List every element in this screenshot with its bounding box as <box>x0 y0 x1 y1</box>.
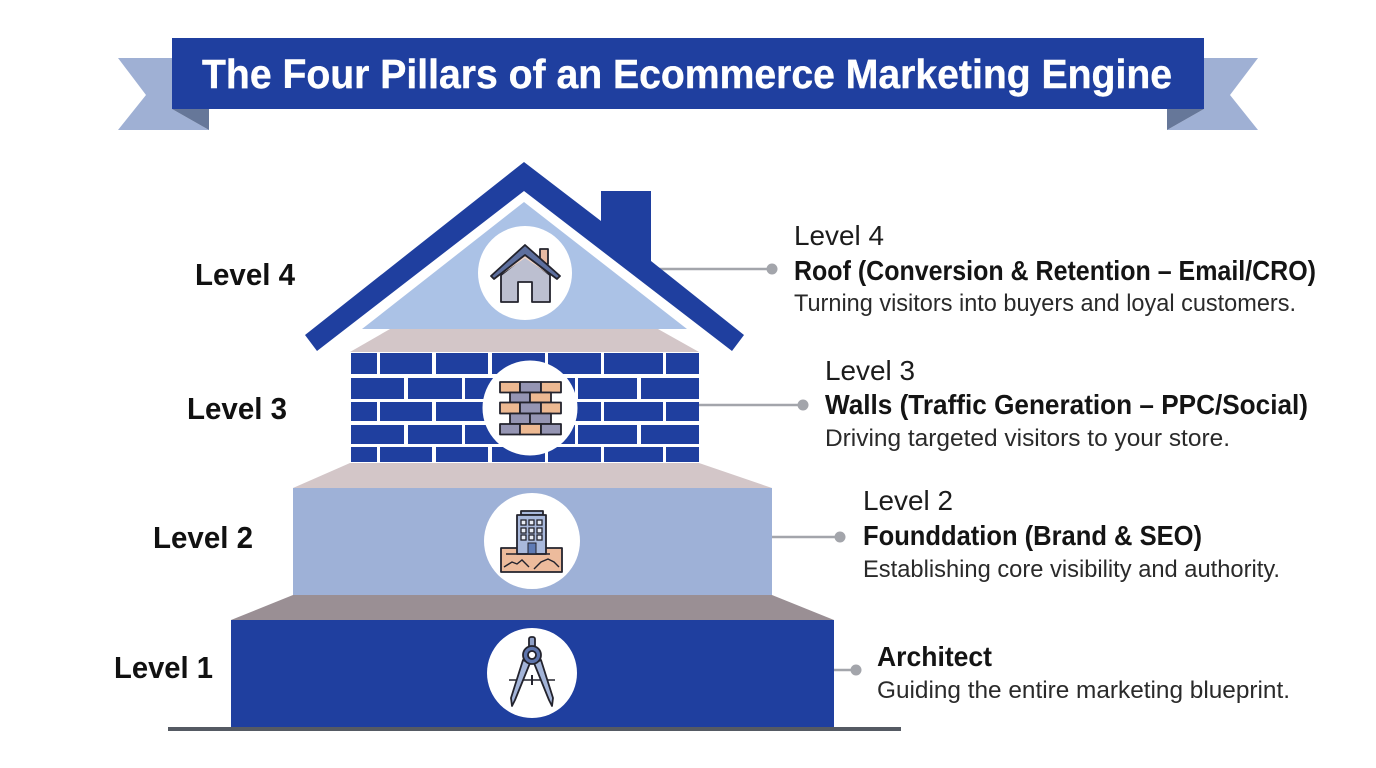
connector level 4 <box>655 264 778 274</box>
text block level 3: Walls (Traffic Generation – PPC/Social) <box>825 389 1308 420</box>
text block level 4: Turning visitors into buyers and loyal customers. <box>794 290 1296 317</box>
icon circle level 4 <box>478 226 572 320</box>
architect block <box>231 620 834 727</box>
icon circle level 1 <box>487 628 577 718</box>
icon: compass <box>509 637 555 706</box>
text block level 1 <box>877 641 1290 704</box>
text block level 4: Roof (Conversion & Retention – Email/CRO) <box>794 255 1316 286</box>
right ribbon tail <box>1167 58 1258 130</box>
banner band <box>172 38 1204 109</box>
ground line <box>168 727 901 731</box>
roof gable fill <box>362 202 687 329</box>
connector level 3 <box>699 400 808 410</box>
text block level 1: Architect <box>877 641 992 672</box>
text block level 2 <box>863 485 1280 583</box>
level 2: foundation <box>293 463 846 595</box>
left ribbon tail <box>118 58 209 130</box>
icon: bricks <box>500 382 561 434</box>
architect ledge <box>231 595 834 620</box>
left label level 1: Level 1 <box>114 650 213 685</box>
level 3: walls <box>350 329 808 462</box>
foundation ledge <box>293 463 772 488</box>
text block level 1: Guiding the entire marketing blueprint. <box>877 677 1290 704</box>
upper ledge <box>350 329 699 352</box>
text block level 2: Founddation (Brand & SEO) <box>863 520 1202 551</box>
right ribbon fold <box>1167 109 1204 130</box>
left label level 4: Level 4 <box>195 257 296 292</box>
title: The Four Pillars of an Ecommerce Marketing Engine <box>202 51 1172 97</box>
left label level 2: Level 2 <box>153 520 253 555</box>
text block level 2: Establishing core visibility and authority. <box>863 556 1280 583</box>
text block level 4 <box>794 220 1316 317</box>
roof and chimney <box>305 162 744 351</box>
text block level 3: Driving targeted visitors to your store. <box>825 425 1230 452</box>
foundation block <box>293 488 772 595</box>
text block level 2: Level 2 <box>863 485 953 516</box>
text block level 3 <box>825 355 1308 452</box>
level 4: roof <box>305 162 778 351</box>
text block level 3: Level 3 <box>825 355 915 386</box>
icon: house <box>491 245 560 302</box>
left label level 3: Level 3 <box>187 391 287 426</box>
title banner <box>118 38 1258 130</box>
text block level 4: Level 4 <box>794 220 884 251</box>
icon circle level 3 <box>482 360 578 456</box>
connector level 2 <box>772 532 846 542</box>
icon circle level 2 <box>484 493 580 589</box>
left ribbon fold <box>172 109 209 130</box>
icon: building on ground <box>501 511 562 572</box>
connector level 1 <box>834 664 862 676</box>
brick wall <box>351 353 699 462</box>
level 1: architect <box>168 595 901 731</box>
